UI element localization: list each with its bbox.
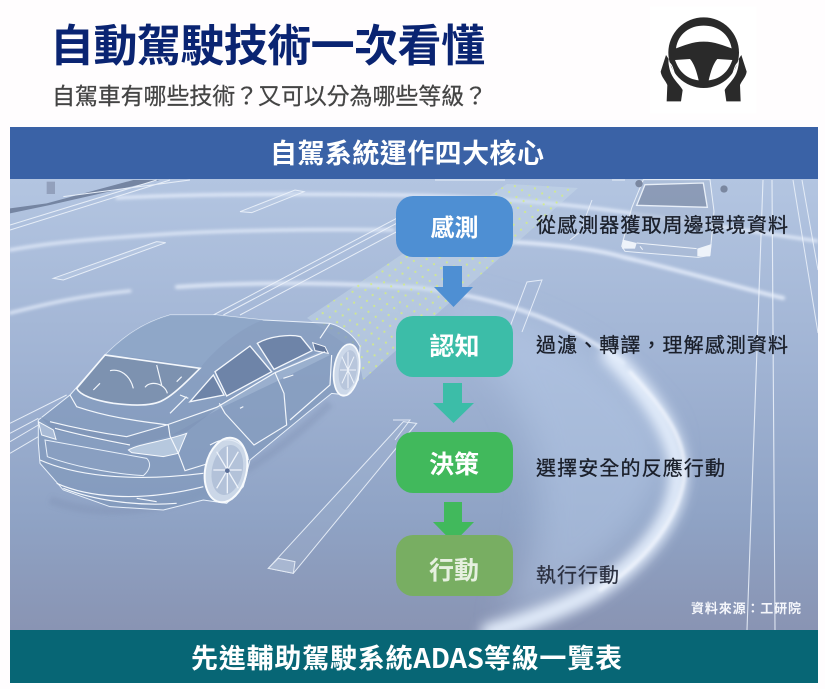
road markings <box>10 180 417 573</box>
description: 認知: 過濾、轉譯，理解感測資料 <box>536 334 788 357</box>
flow step: 決策: 決策 <box>429 451 479 479</box>
background road illustration <box>10 179 818 632</box>
arrow: 決策 to 行動 <box>433 502 474 543</box>
title: 自動駕駛技術一次看懂 <box>50 22 485 71</box>
panel: four core functions <box>10 127 818 632</box>
flow step: 決策 <box>396 432 513 493</box>
arrow: 感測 to 認知 <box>434 266 473 307</box>
rear wheel <box>204 436 248 504</box>
description: 行動: 執行行動 <box>536 564 619 587</box>
section heading: ADAS levels <box>10 630 818 683</box>
section heading band <box>10 127 818 179</box>
flow step: 行動: 行動 <box>429 557 479 585</box>
lidar dot strip <box>307 184 578 380</box>
flow step: 感測 <box>396 196 513 257</box>
section heading band: 自駕系統運作四大核心 <box>270 139 544 169</box>
subtitle: 自駕車有哪些技術？又可以分為哪些等級？ <box>52 83 487 109</box>
arrow: 認知 to 決策 <box>433 383 474 423</box>
header background <box>0 0 825 127</box>
sensor glow arcs <box>10 194 817 632</box>
soft glow inside sensor arc <box>506 332 662 608</box>
description: 決策: 選擇安全的反應行動 <box>536 456 725 480</box>
flow step: 認知: 認知 <box>429 333 480 361</box>
description: 感測: 從感測器獲取周邊環境資料 <box>536 214 788 237</box>
source note: 資料來源：工研院 <box>691 601 801 616</box>
front wheel <box>332 343 361 397</box>
icon: hands on steering wheel <box>650 7 757 113</box>
illustration: distant car <box>622 180 728 257</box>
illustration: wireframe car <box>38 315 363 511</box>
flow step: 感測: 感測 <box>430 214 478 242</box>
section heading: ADAS levels: 先進輔助駕駛系統ADAS等級一覽表 <box>191 637 623 676</box>
flow step: 認知 <box>396 316 513 377</box>
flow step: 行動 <box>396 535 513 596</box>
